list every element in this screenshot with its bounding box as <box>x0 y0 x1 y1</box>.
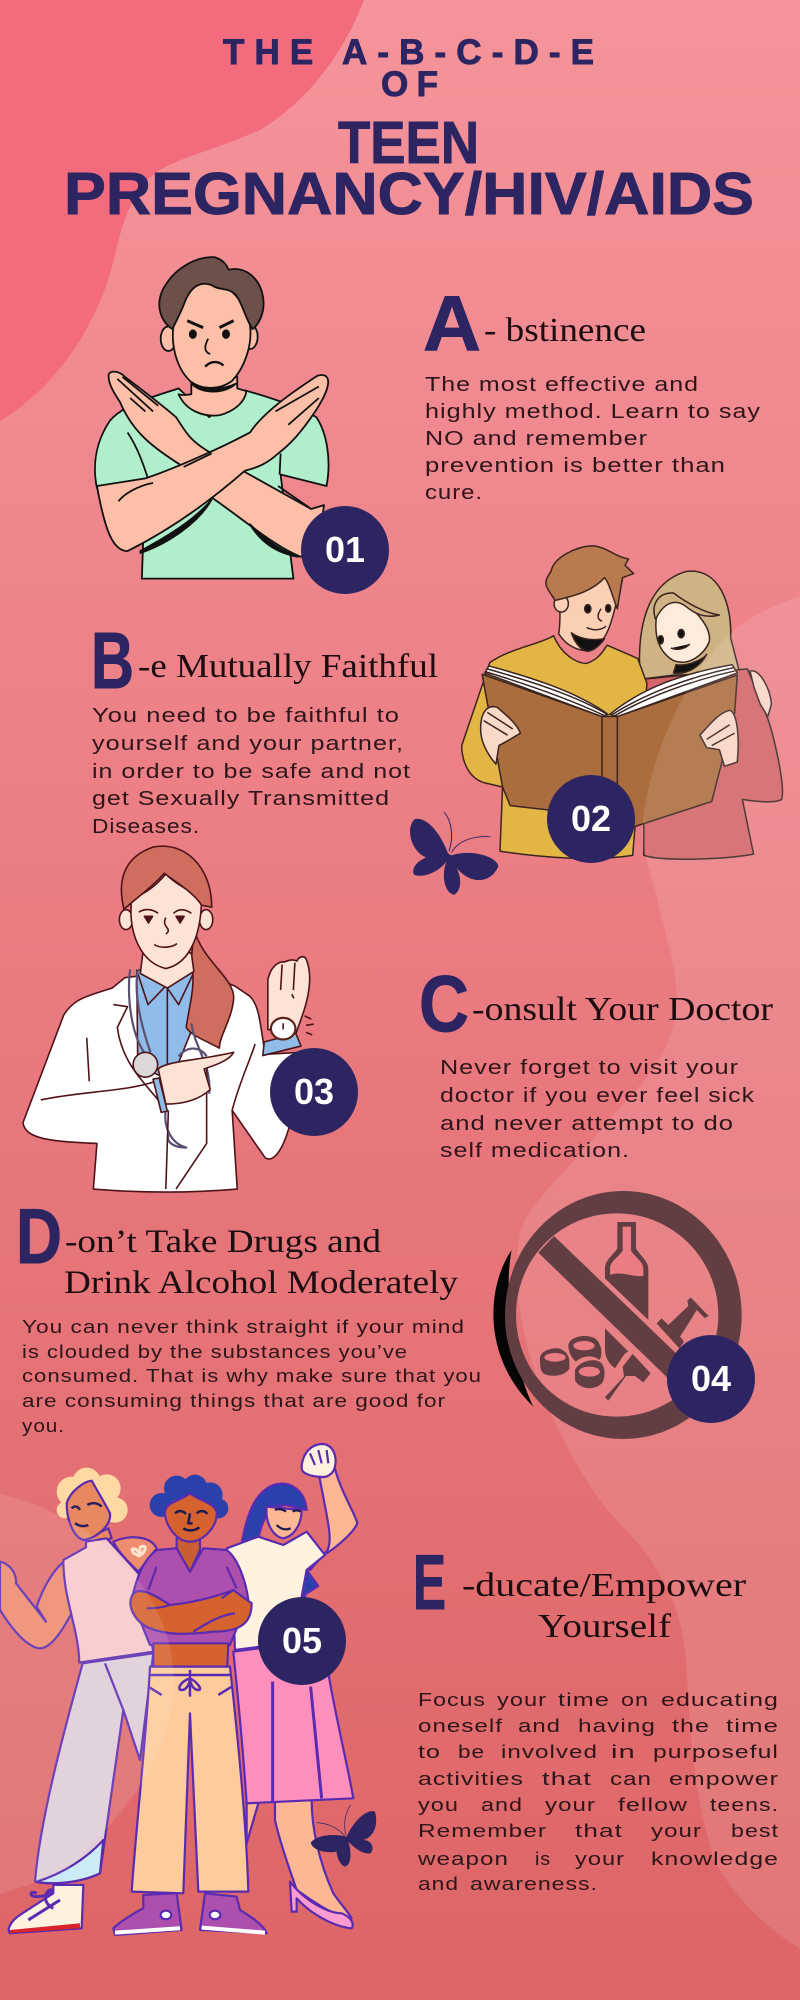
left ear <box>161 326 176 351</box>
woman hair <box>639 571 740 679</box>
line 6: best <box>731 1820 779 1841</box>
line 3: purposeful <box>653 1741 779 1762</box>
ring <box>505 1191 742 1439</box>
right ear <box>242 325 258 349</box>
badge number: 02 <box>571 798 611 839</box>
line 3: be <box>458 1741 485 1762</box>
line 1: on <box>621 1689 649 1710</box>
line: You can never think straight if your mind <box>22 1317 465 1337</box>
antennae <box>444 812 491 852</box>
left woman neck <box>85 1528 112 1543</box>
middle woman face <box>165 1493 217 1542</box>
placket <box>137 970 195 1077</box>
line: Diseases. <box>92 816 200 838</box>
curl <box>102 1497 128 1523</box>
shoe soles <box>115 1928 265 1933</box>
line 8: awareness. <box>470 1873 598 1894</box>
woman hand on shoulder <box>750 671 771 717</box>
middle woman features <box>175 1511 207 1530</box>
pill top <box>568 1336 601 1362</box>
badge circle <box>270 1048 358 1136</box>
line: in order to be safe and not <box>92 761 411 783</box>
nose <box>205 339 210 354</box>
middle woman arms <box>131 1590 252 1634</box>
line 3: involved <box>501 1741 598 1762</box>
right woman leg <box>275 1800 352 1918</box>
badge number: 01 <box>325 529 365 570</box>
line 5: fellow <box>618 1794 688 1815</box>
left woman top <box>63 1538 153 1663</box>
left woman features <box>72 1503 102 1526</box>
number badge 04 <box>667 1335 755 1423</box>
butterfly: beside women <box>311 1805 376 1867</box>
curl <box>208 1498 228 1518</box>
line: Never forget to visit your <box>440 1057 739 1079</box>
line 4: can <box>610 1768 652 1789</box>
pill holes <box>544 1341 600 1377</box>
line: are consuming things that are good for <box>22 1391 446 1411</box>
heading E line 2: Yourself <box>538 1608 672 1645</box>
pointing hand <box>158 1052 234 1104</box>
right woman sleeve accent <box>302 1570 318 1597</box>
line: highly method. Learn to say <box>425 401 761 423</box>
book cover <box>482 674 737 826</box>
line 5: and <box>481 1794 523 1815</box>
badge circle <box>301 506 389 594</box>
bottle <box>605 1222 648 1320</box>
line 4 <box>418 1768 779 1789</box>
illustration: no drugs and alcohol sign <box>493 1191 742 1439</box>
line 7: is <box>535 1848 551 1869</box>
line 2: and <box>518 1715 561 1736</box>
title <box>64 33 754 227</box>
line: self medication. <box>440 1140 630 1162</box>
trouser hem <box>37 1840 103 1883</box>
line: NO and remember <box>425 428 648 450</box>
black crescent <box>493 1250 533 1407</box>
left woman shoulder with heart <box>113 1537 157 1572</box>
line 2 <box>418 1715 779 1736</box>
hole left <box>544 1353 566 1362</box>
number badge 05 <box>258 1597 346 1685</box>
pills <box>540 1336 605 1388</box>
man ear <box>554 595 568 612</box>
line 3: to <box>418 1741 441 1762</box>
number badge 02 <box>547 775 635 863</box>
hole top <box>573 1341 595 1350</box>
pill bottom <box>575 1360 605 1388</box>
line 7 <box>417 1848 779 1869</box>
needle <box>605 1354 651 1401</box>
line 8: and <box>418 1873 459 1894</box>
face <box>173 281 250 388</box>
hole bottom <box>579 1367 600 1377</box>
pill left <box>540 1348 569 1376</box>
left woman face <box>67 1481 110 1540</box>
stethoscope disc <box>133 1052 158 1077</box>
line 7: your <box>575 1848 625 1869</box>
ear left <box>119 910 133 930</box>
right pages <box>610 665 737 717</box>
man eyes <box>585 605 611 613</box>
letter C: C <box>419 959 469 1048</box>
background blob: top left <box>0 0 364 421</box>
slash <box>538 1236 693 1387</box>
body E <box>417 1689 779 1894</box>
heading C: -onsult Your Doctor <box>472 991 774 1028</box>
woman finger lines <box>707 725 735 746</box>
line 6: your <box>651 1820 702 1841</box>
right woman raised arm <box>303 1468 357 1570</box>
body A <box>425 374 761 504</box>
line 7: knowledge <box>651 1848 779 1869</box>
middle woman top <box>132 1548 248 1645</box>
middle woman midriff <box>153 1643 228 1667</box>
woman sweater <box>643 669 782 859</box>
page lines <box>486 668 735 716</box>
line 3: in <box>611 1741 636 1762</box>
motion ticks <box>283 1016 314 1035</box>
number badge 03 <box>270 1048 358 1136</box>
letter D: D <box>16 1192 62 1280</box>
body C <box>440 1057 755 1162</box>
background blob: right translucent overlay <box>517 596 800 1949</box>
line 8 <box>418 1873 598 1894</box>
line 6: Remember <box>418 1820 547 1841</box>
fist finger lines <box>310 1450 328 1465</box>
badge circle <box>547 775 635 863</box>
left woman arm <box>0 1560 77 1648</box>
line: consumed. That is why make sure that you <box>22 1366 482 1386</box>
woman eyes and smile <box>658 629 690 649</box>
butterfly: beside couple <box>410 812 498 895</box>
curl <box>150 1493 174 1517</box>
line 5: you <box>418 1794 459 1815</box>
shoe eyelet right <box>210 1911 220 1919</box>
man collar shadow <box>571 633 605 651</box>
line 5: teens. <box>710 1794 779 1815</box>
illustration: couple reading a book <box>462 546 782 859</box>
neck shadow <box>192 384 236 392</box>
badge number: 05 <box>282 1620 322 1661</box>
middle woman trousers <box>132 1667 248 1893</box>
sleeve lines and finger lines <box>117 377 319 509</box>
curl <box>73 1468 101 1496</box>
man sweater <box>462 636 647 858</box>
mouth <box>205 362 223 367</box>
heading E line 1: -ducate/Empower <box>462 1567 747 1604</box>
watch <box>271 1018 295 1039</box>
shirt <box>137 970 195 1081</box>
neck <box>140 953 194 988</box>
line: yourself and your partner, <box>92 733 404 755</box>
man hand on book <box>481 707 520 764</box>
arm going left <box>97 375 328 551</box>
finger lines <box>281 963 295 998</box>
badge number: 04 <box>691 1358 731 1399</box>
line: doctor if you ever feel sick <box>440 1085 755 1107</box>
line 5 <box>418 1794 779 1815</box>
line 4: activities <box>418 1768 524 1789</box>
raised hand <box>268 957 310 1034</box>
face <box>131 874 202 969</box>
shoe laces <box>28 1890 60 1920</box>
illustration: doctor <box>23 846 314 1192</box>
line 1: Focus <box>418 1689 486 1710</box>
line 2: the <box>672 1715 710 1736</box>
left woman trousers <box>35 1653 153 1883</box>
t-shirt <box>95 388 329 579</box>
woman face <box>656 597 710 662</box>
number badge 01 <box>301 506 389 594</box>
illustration: man crossing arms <box>95 257 329 579</box>
title line 1: THE A-B-C-D-E <box>223 33 594 72</box>
doctor eyes <box>144 916 184 923</box>
letter A: A <box>423 279 481 367</box>
line 2: oneself <box>418 1715 503 1736</box>
line 4: empower <box>669 1768 779 1789</box>
curl <box>57 1502 73 1518</box>
title line 3: TEEN <box>338 110 479 176</box>
line 2: time <box>726 1715 779 1736</box>
line 1: educating <box>661 1689 779 1710</box>
hair <box>159 257 264 329</box>
left brow <box>187 321 203 328</box>
man smile <box>587 609 606 630</box>
long hair <box>186 928 234 1048</box>
curl <box>183 1475 207 1499</box>
middle left shoe <box>113 1893 182 1935</box>
line 6: that <box>575 1820 623 1841</box>
right woman face <box>266 1507 302 1538</box>
line: is clouded by the substances you’ve <box>22 1342 408 1362</box>
line: get Sexually Transmitted <box>92 788 390 810</box>
top hair <box>121 846 212 909</box>
wings <box>410 819 498 895</box>
left eye <box>190 330 196 338</box>
title line 4: PREGNANCY/HIV/AIDS <box>64 161 754 227</box>
line: You need to be faithful to <box>92 705 400 727</box>
badge number: 03 <box>294 1071 334 1112</box>
curls <box>57 1477 87 1507</box>
back leg <box>247 1800 258 1843</box>
line 1: time <box>558 1689 610 1710</box>
right woman top <box>227 1532 325 1650</box>
skirt folds <box>273 1682 322 1802</box>
curl <box>197 1482 223 1508</box>
title line 2: OF <box>381 65 438 104</box>
line 1 <box>418 1689 779 1710</box>
syringe <box>657 1297 709 1348</box>
letter B: B <box>91 616 134 705</box>
book spine <box>602 717 617 826</box>
illustration: three empowered women <box>0 1444 357 1935</box>
left woman hair <box>57 1468 128 1523</box>
badge circle <box>258 1597 346 1685</box>
middle woman neck <box>177 1538 200 1572</box>
curl <box>93 1474 121 1502</box>
line 5: your <box>545 1794 596 1815</box>
right brow <box>219 321 234 328</box>
right woman fist <box>302 1444 336 1477</box>
line 4: that <box>542 1768 592 1789</box>
woman hair fringe <box>654 593 719 619</box>
woman collar shadow <box>673 654 707 673</box>
heading D line 2: Drink Alcohol Moderately <box>64 1265 459 1301</box>
line 6 <box>418 1820 779 1841</box>
waistband and drawstring <box>148 1670 232 1697</box>
line: cure. <box>425 482 483 504</box>
section C: consult your doctor <box>419 959 774 1162</box>
line: prevention is better than <box>425 455 726 477</box>
left pages <box>485 666 608 717</box>
letter E: E <box>413 1538 446 1626</box>
coat lapel and arm lines <box>41 1005 255 1189</box>
line 3 <box>418 1741 779 1762</box>
cuff <box>153 1078 167 1112</box>
arm shadow <box>140 499 298 557</box>
lower bottle <box>605 1328 628 1368</box>
line: The most effective and <box>425 374 699 396</box>
middle right shoe <box>200 1893 267 1933</box>
body D <box>22 1317 482 1436</box>
coat <box>23 969 301 1192</box>
sleeve cuff <box>263 1034 301 1056</box>
sleeve lines <box>148 1567 237 1590</box>
right woman features <box>275 1509 301 1529</box>
arm going right <box>109 372 324 557</box>
stethoscope tube <box>129 969 209 1148</box>
heading B: -e Mutually Faithful <box>138 648 438 685</box>
trouser seam <box>105 1663 123 1710</box>
man finger lines <box>484 712 513 735</box>
line 1: your <box>497 1689 547 1710</box>
section D: don't take drugs <box>16 1192 482 1436</box>
skirt <box>233 1640 353 1803</box>
man face <box>559 571 622 651</box>
badge circle <box>667 1335 755 1423</box>
wings <box>311 1811 376 1867</box>
brows, nose and mouth <box>139 910 191 947</box>
right woman hair <box>242 1484 307 1543</box>
body B <box>92 705 411 838</box>
heading A: - bstinence <box>484 312 646 349</box>
line: and never attempt to do <box>440 1113 734 1135</box>
curl <box>164 1476 189 1501</box>
neck <box>179 377 246 416</box>
man hair <box>546 546 634 609</box>
shoe sole <box>10 1923 80 1933</box>
line: you. <box>22 1416 65 1436</box>
heart tattoo <box>132 1546 145 1556</box>
ear right <box>199 910 213 930</box>
line 2: having <box>578 1715 656 1736</box>
line 7: weapon <box>417 1848 509 1869</box>
section B: be mutually faithful <box>91 616 438 838</box>
right eye <box>223 330 229 338</box>
woman hand on book <box>700 710 738 766</box>
bottle glass <box>610 1227 643 1276</box>
left woman shoe <box>9 1885 83 1933</box>
arm fold lines <box>147 1590 235 1632</box>
background blob: left translucent overlay <box>0 1494 174 1894</box>
antennae <box>317 1805 351 1836</box>
middle woman curly hair <box>150 1475 228 1518</box>
section A: abstinence <box>423 279 761 504</box>
shoe eyelet left <box>161 1911 171 1919</box>
heading D line 1: -on’t Take Drugs and <box>65 1224 382 1260</box>
heel <box>290 1882 353 1928</box>
section E: educate and empower <box>413 1538 779 1894</box>
